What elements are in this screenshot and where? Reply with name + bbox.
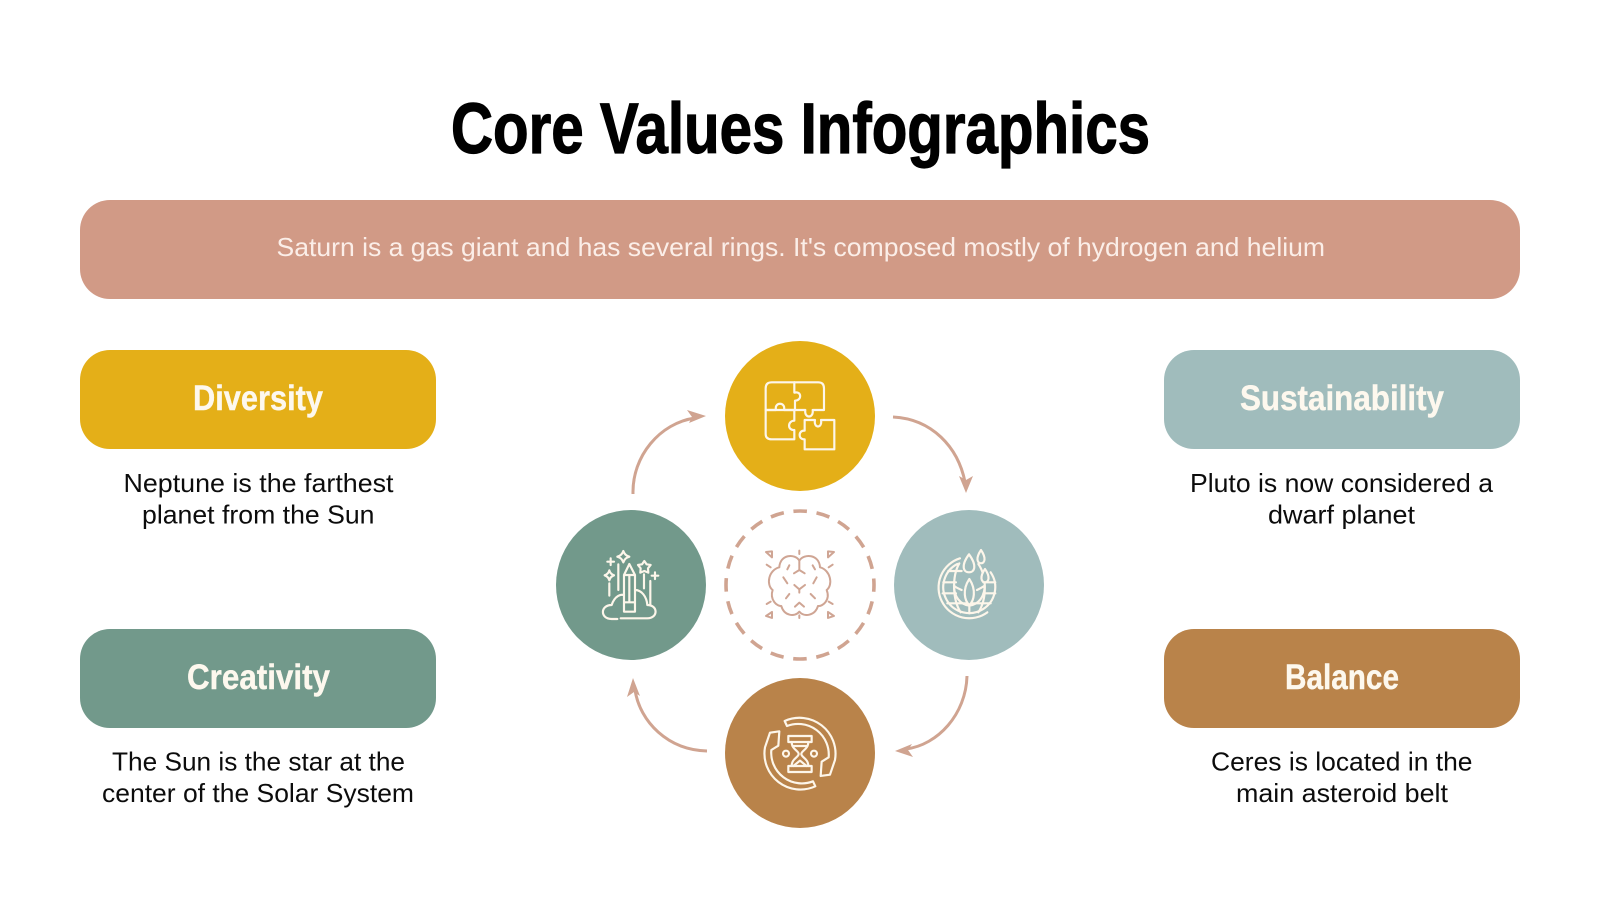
panel: Balance: Ceres is located in the [1211,746,1472,776]
panel: Diversity [80,350,436,530]
panel: Sustainability: dwarf planet [1268,500,1416,530]
panel: Creativity: The Sun is the star at the [112,746,405,776]
arrow: bottom to left [627,678,707,751]
node: Balance hourglass [725,678,875,828]
node: Sustainability globe [894,510,1044,660]
panel: Creativity [80,629,436,808]
node: Diversity puzzle [725,341,875,491]
panel: Creativity: center of the Solar System [102,778,414,808]
arrow: right to bottom [895,676,967,757]
panel: Balance: Balance [1285,658,1399,697]
panel: Balance [1164,629,1520,808]
panel: Sustainability [1164,350,1520,530]
icon: puzzle [766,382,834,449]
panel: Diversity: Neptune is the farthest [124,468,394,498]
banner: Saturn is a gas giant and has several rings. It's composed mostly of hydrogen and helium [276,232,1325,262]
icon: hourglass with cycle arrows [764,718,836,790]
panel: Creativity: Creativity [187,658,330,697]
arrow: left to top [633,410,706,494]
banner [80,200,1520,299]
icon: globe with leaves and drops [939,550,995,618]
title: Core Values Infographics [451,90,1150,169]
icon: brain [766,551,834,618]
arrow: top to right [893,417,973,493]
panel: Sustainability: Pluto is now considered a [1190,468,1494,498]
panel: Sustainability: Sustainability [1240,379,1444,418]
node: center brain [726,511,874,659]
panel: Balance: main asteroid belt [1236,778,1449,808]
panel: Diversity: planet from the Sun [142,500,374,530]
panel: Diversity: Diversity [193,379,323,418]
node: Creativity pencil [556,510,706,660]
icon: pencil in cloud with stars [603,551,658,619]
